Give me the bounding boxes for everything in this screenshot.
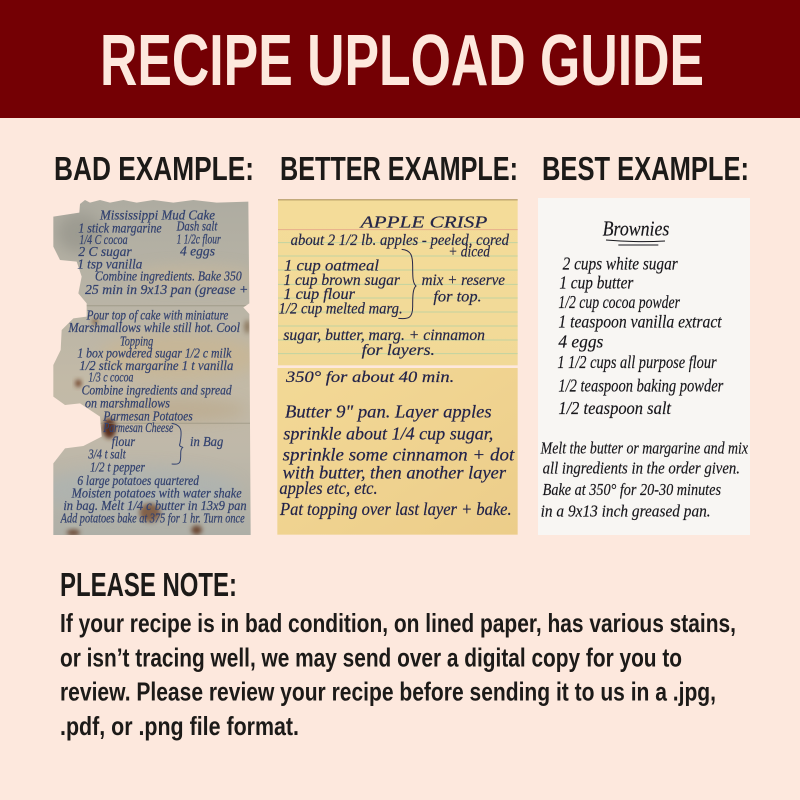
panel: best example, clean handwritten recipe: in a 9x13 inch greased pan. xyxy=(541,502,711,521)
card: bottom plain index card xyxy=(277,368,518,535)
card: bottom plain index card: apples etc, etc. xyxy=(279,478,378,498)
handwritten recipe text: Combine ingredients. Bake 350 xyxy=(95,269,242,284)
handwritten recipe text: Add potatoes bake at 375 for 1 hr. Turn once xyxy=(60,511,245,526)
card: top lined index card: 1/2 cup melted marg. xyxy=(279,300,403,317)
handwritten recipe text: Parmesan Cheese xyxy=(103,420,173,435)
handwritten recipe text: 1/2 t pepper xyxy=(90,460,146,475)
handwritten recipe text: on marshmallows xyxy=(85,396,170,411)
panel: best example, clean handwritten recipe: 1/2 teaspoon baking powder xyxy=(558,375,724,395)
card: top lined index card: for layers. xyxy=(362,342,435,359)
handwritten recipe text: 1/2 stick margarine 1 t vanilla xyxy=(79,358,234,373)
note text block: .pdf, or .png file format. xyxy=(60,711,299,741)
panel: bad example, torn stained recipe xyxy=(53,200,251,535)
handwritten recipe text: flour xyxy=(112,434,136,449)
handwritten recipe text: in Bag xyxy=(190,434,224,449)
panel: best example, clean handwritten recipe: all ingredients in the order given. xyxy=(543,458,740,477)
card: top lined index card: for top. xyxy=(433,289,482,306)
panel: best example, clean handwritten recipe: 1/2 cup cocoa powder xyxy=(558,292,681,312)
header band with title xyxy=(0,0,800,118)
panel: best example, clean handwritten recipe: 1 teaspoon vanilla extract xyxy=(558,312,723,332)
panel: best example, clean handwritten recipe: Melt the butter or margarine and mix xyxy=(540,438,748,457)
panel: best example, clean handwritten recipe: Bake at 350° for 20-30 minutes xyxy=(543,480,721,499)
card: bottom plain index card: sprinkle about 1/4 cup sugar, xyxy=(283,423,493,443)
panel: best example, clean handwritten recipe: 1 cup butter xyxy=(559,272,634,292)
card: top lined index card: 1 cup oatmeal xyxy=(284,258,380,275)
handwritten recipe text: 1 stick margarine xyxy=(78,221,162,236)
heading: bad example: BAD EXAMPLE: xyxy=(54,151,254,188)
card: top lined index card xyxy=(278,199,518,365)
handwritten recipe text: Parmesan Potatoes xyxy=(102,409,193,424)
card: top lined index card: 1 cup brown sugar xyxy=(283,272,401,289)
handwritten recipe text: Pour top of cake with miniature xyxy=(86,307,228,322)
handwritten recipe text: 6 large potatoes quartered xyxy=(77,473,199,488)
handwritten recipe text: Combine ingredients and spread xyxy=(82,382,232,397)
panel: best example, clean handwritten recipe: 2 cups white sugar xyxy=(563,253,679,273)
card: top lined index card: about 2 1/2 lb. apples - peeled, cored xyxy=(291,232,510,249)
handwritten recipe text xyxy=(60,207,248,526)
handwritten recipe text: Mississippi Mud Cake xyxy=(99,207,215,222)
card: top lined index card: sugar, butter, marg. + cinnamon xyxy=(283,327,485,344)
handwritten recipe text: 1/3 c cocoa xyxy=(88,370,134,385)
card: top lined index card: 1 cup flour xyxy=(283,286,356,303)
card: bottom plain index card: with butter, then another layer xyxy=(283,463,507,483)
card: bottom plain index card: 350° for about 40 min. xyxy=(285,369,454,386)
handwritten recipe text: Topping xyxy=(120,333,154,348)
card: bottom plain index card: Butter 9" pan. Layer apples xyxy=(285,401,492,421)
handwritten recipe text: Dash salt xyxy=(176,219,218,234)
card: top lined index card: + diced xyxy=(448,244,491,261)
panel: best example, clean handwritten recipe: 1 1/2 cups all purpose flour xyxy=(557,352,717,372)
recipe title: brownies: Brownies xyxy=(603,219,669,241)
panel: better example, two index cards xyxy=(277,199,518,535)
card: bottom plain index card: Pat topping over last layer + bake. xyxy=(279,499,512,519)
panel: best example, clean handwritten recipe: 1/2 teaspoon salt xyxy=(558,398,672,418)
handwritten recipe text: 1 1/2c flour xyxy=(177,231,221,246)
card: top lined index card: APPLE CRISP xyxy=(359,212,488,231)
handwritten recipe text: 1 box powdered sugar 1/2 c milk xyxy=(77,346,232,361)
panel: best example, clean handwritten recipe: 4 eggs xyxy=(558,331,603,351)
heading: better example: BETTER EXAMPLE: xyxy=(280,151,518,188)
handwritten recipe text: 3/4 t salt xyxy=(88,446,126,461)
handwritten recipe text: Marshmallows while still hot. Cool xyxy=(67,320,240,335)
handwritten recipe text: 25 min in 9x13 pan (grease + xyxy=(85,282,248,297)
handwritten recipe text: Moisten potatoes with water shake xyxy=(71,485,242,500)
panel: best example, clean handwritten recipe xyxy=(538,198,750,535)
handwritten recipe text: 2 C sugar xyxy=(78,244,132,259)
note text block xyxy=(60,608,736,741)
handwritten recipe text: 4 eggs xyxy=(180,243,215,258)
heading: please note: PLEASE NOTE: xyxy=(60,567,237,604)
handwritten recipe text: 1 tsp vanilla xyxy=(77,256,143,271)
card: bottom plain index card: sprinkle some cinnamon + dot xyxy=(283,445,515,465)
handwritten recipe text: in bag. Melt 1/4 c butter in 13x9 pan xyxy=(63,498,247,513)
card: top lined index card: mix + reserve xyxy=(422,272,505,289)
handwritten recipe text: 1/4 C cocoa xyxy=(79,232,128,247)
